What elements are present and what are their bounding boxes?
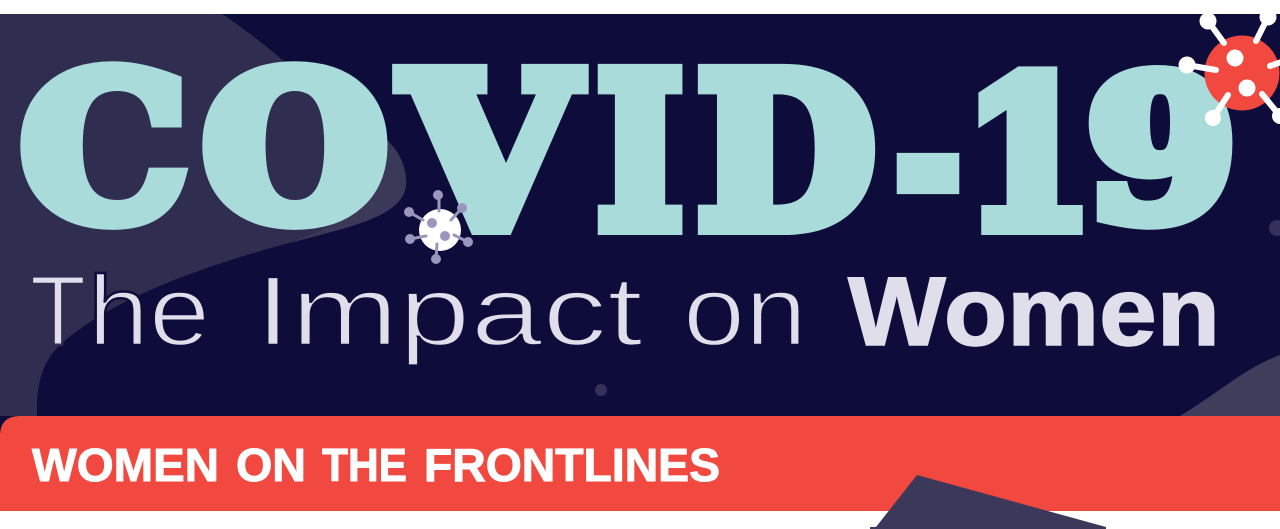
title: COVID-19: 1 bbox=[964, 35, 1093, 274]
dark roof shape bbox=[870, 475, 1106, 529]
subtitle: The Impact on Women: T bbox=[30, 255, 86, 366]
title: COVID-19: - bbox=[892, 26, 964, 286]
title: COVID-19 bbox=[21, 26, 1236, 286]
banner heading bbox=[32, 439, 720, 491]
subtitle: The Impact on Women: Women bbox=[848, 257, 1220, 366]
icon: white virus bbox=[406, 192, 472, 262]
title: COVID-19: 9 bbox=[1087, 36, 1236, 264]
banner heading: FRONTLINES bbox=[424, 439, 720, 491]
title: COVID-19: C bbox=[21, 31, 187, 265]
banner heading: WOMEN bbox=[32, 439, 219, 491]
subtitle: The Impact on Women: on bbox=[683, 255, 807, 366]
subtitle: The Impact on Women: he bbox=[88, 255, 210, 366]
title: COVID-19: D bbox=[697, 29, 875, 276]
banner: women on the frontlines bbox=[0, 416, 1280, 511]
title: COVID-19: V bbox=[401, 29, 579, 276]
title: COVID-19: O bbox=[203, 31, 387, 265]
banner heading: ON bbox=[236, 439, 306, 491]
title: COVID-19: I bbox=[597, 29, 683, 276]
subtitle: The Impact on Women bbox=[30, 255, 1220, 366]
banner heading: THE bbox=[322, 439, 407, 491]
subtitle: The Impact on Women: Impact bbox=[255, 255, 643, 366]
header background bbox=[0, 14, 1280, 434]
icon: red virus bbox=[1182, 12, 1280, 123]
